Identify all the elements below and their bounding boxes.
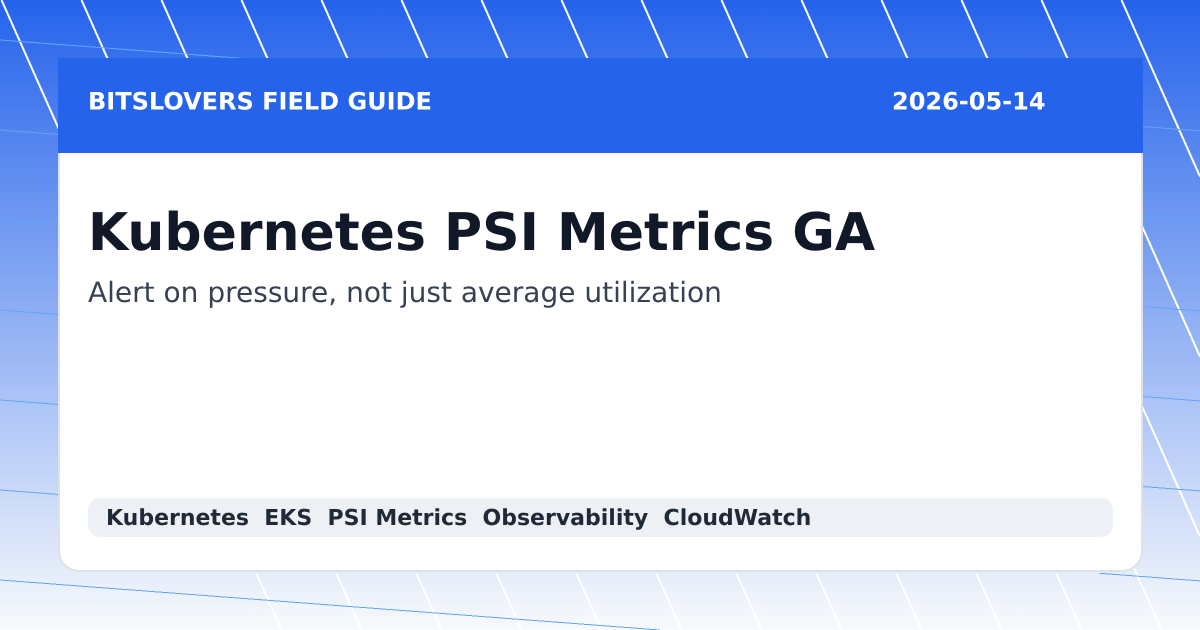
title: Kubernetes PSI Metrics GA: [88, 203, 875, 263]
date: 2026-05-14: [892, 88, 1046, 116]
subtitle: Alert on pressure, not just average utilization: [88, 276, 722, 309]
brand label: BITSLOVERS FIELD GUIDE: [88, 88, 432, 116]
panel: card: [58, 58, 1143, 571]
tags: Kubernetes EKS PSI Metrics Observability CloudWatch: [106, 506, 811, 531]
tag bar: [88, 498, 1113, 537]
header band: [58, 58, 1143, 153]
